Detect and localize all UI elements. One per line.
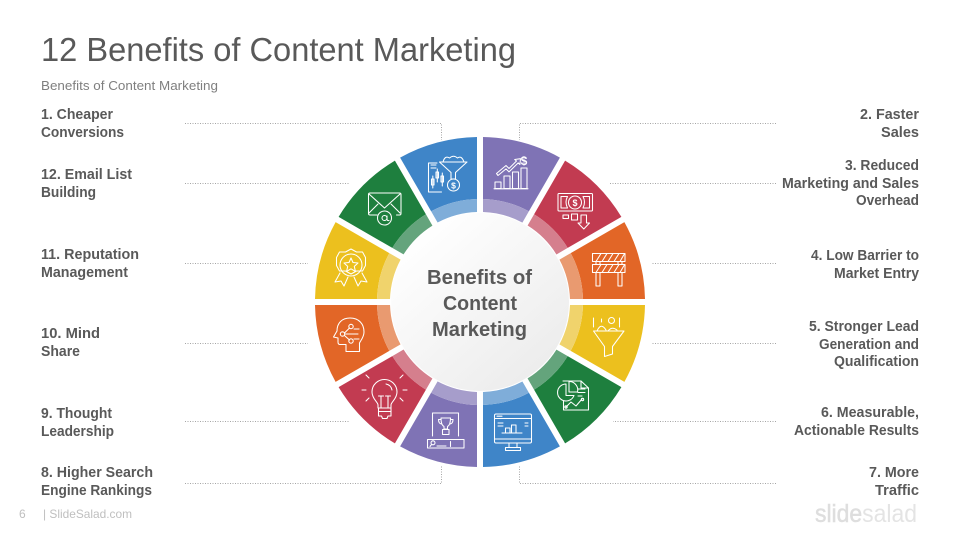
segment: mind share (orange) [297,278,410,382]
label: 11. Reputation Management: Management [41,265,128,281]
center text: Marketing [432,319,527,341]
icon: light bulb [362,375,407,418]
label: 8. Higher Search Engine Rankings: Engine Rankings [41,483,152,499]
label: 5. Stronger Lead Generation and Qualification: Generation and [819,337,919,353]
segment: email list (green) [339,150,441,260]
center text: Content [443,293,517,315]
label: 8. Higher Search Engine Rankings: 8. Higher Search [41,465,153,481]
center circle [391,213,569,391]
label: 6. Measurable, Actionable Results: Actionable Results [794,423,919,439]
label: 3. Reduced Marketing and Sales Overhead [782,158,919,209]
label: 11. Reputation Management: 11. Reputation [41,247,139,263]
label: 9. Thought Leadership: 9. Thought [41,406,112,422]
label: 12. Email List Building [41,167,132,201]
segment: reputation (yellow) [315,222,401,299]
label: 2. Faster Sales: Sales [881,125,919,141]
label: 6. Measurable, Actionable Results: 6. Measurable, [821,405,919,421]
label: 9. Thought Leadership [41,406,114,440]
icon: report document [558,381,588,410]
icon: lead funnel [594,318,624,356]
segment: search rankings (purple) [400,381,477,467]
segment: cheaper conversions (blue) [400,119,504,232]
icon: money and down arrow: $ [572,198,578,208]
icon: road barrier [592,254,625,286]
label: 7. More Traffic: Traffic [875,483,919,499]
label: 10. Mind Share: Share [41,344,80,360]
label: 1. Cheaper Conversions: Conversions [41,125,124,141]
icon: envelope with at sign [368,193,401,225]
icon: head with network [334,318,364,352]
icon: trophy and search box [428,413,464,448]
label: 3. Reduced Marketing and Sales Overhead: Marketing and Sales [782,176,919,192]
label: 9. Thought Leadership: Leadership [41,424,114,440]
segment: faster sales (purple) [483,137,560,223]
label: 2. Faster Sales [860,107,919,141]
center text: Benefits of [427,267,532,289]
logo: slidesalad: slidesalad [815,500,917,528]
label: 5. Stronger Lead Generation and Qualification: 5. Stronger Lead [809,319,919,335]
label: 2. Faster Sales: 2. Faster [860,107,919,123]
label: 4. Low Barrier to Market Entry [811,248,919,282]
label: 7. More Traffic [869,465,919,499]
center text [427,267,532,341]
label: 6. Measurable, Actionable Results [794,405,919,439]
label: 8. Higher Search Engine Rankings [41,465,153,499]
icon: rising bar chart with dollar: $ [521,154,528,168]
leader lines [185,124,776,484]
title: 12 Benefits of Content Marketing [41,31,516,68]
icon: conversion funnel with candlesticks: $ [451,180,456,190]
label: 12. Email List Building: 12. Email List [41,167,132,183]
segment: thought leadership (red) [328,341,438,443]
subtitle: Benefits of Content Marketing [41,79,218,93]
label: 1. Cheaper Conversions [41,107,124,141]
label: 10. Mind Share: 10. Mind [41,326,100,342]
label: 4. Low Barrier to Market Entry: Market Entry [834,266,919,282]
label: 1. Cheaper Conversions: 1. Cheaper [41,107,113,123]
segment: reduced overhead (red) [522,161,632,263]
label: 5. Stronger Lead Generation and Qualification [809,319,919,370]
icon: monitor with chart [494,414,532,450]
label: 5. Stronger Lead Generation and Qualification: Qualification [834,354,919,370]
icon: award badge [335,249,367,286]
segment: lead generation (yellow) [559,305,645,382]
label: 10. Mind Share [41,326,100,360]
label: 3. Reduced Marketing and Sales Overhead: 3. Reduced [845,158,919,174]
segment: low barrier (orange) [550,222,663,326]
label: 12. Email List Building: Building [41,185,96,201]
label: 4. Low Barrier to Market Entry: 4. Low Barrier to [811,248,919,264]
footer site name: | SlideSalad.com [43,507,132,521]
label: 11. Reputation Management [41,247,139,281]
segment: more traffic (blue) [456,372,560,485]
page number: 6 [19,507,26,521]
label: 7. More Traffic: 7. More [869,465,919,481]
segment: measurable results (green) [519,344,621,454]
label: 3. Reduced Marketing and Sales Overhead: Overhead [856,193,919,209]
